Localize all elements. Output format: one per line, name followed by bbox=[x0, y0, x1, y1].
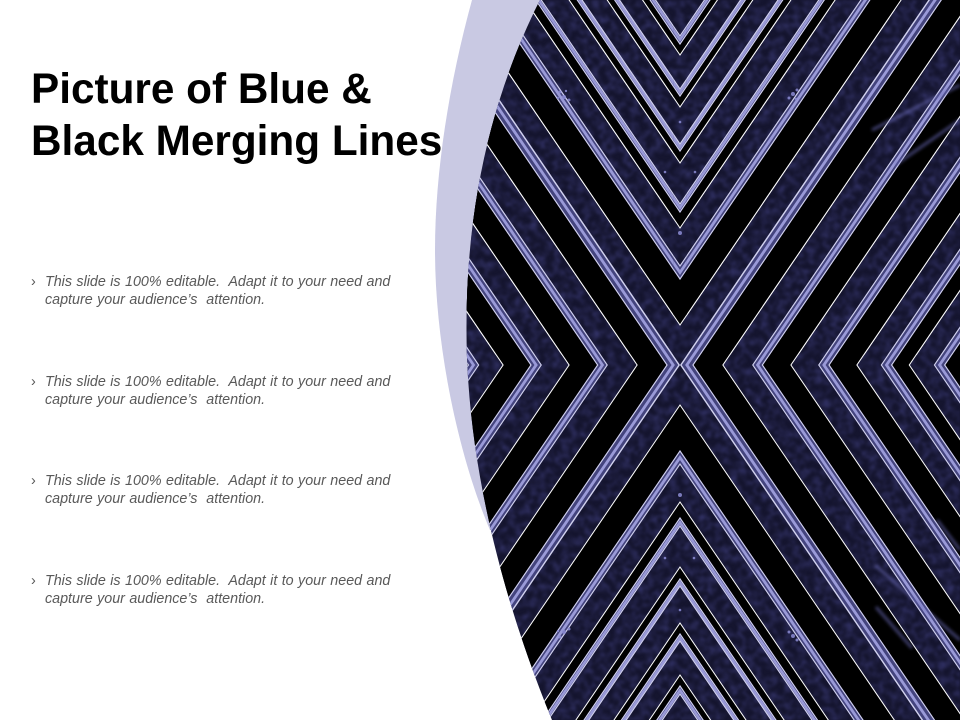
bullet text block 3: › bbox=[31, 473, 36, 489]
bullet text block 3: This slide is 100% editable. Adapt it to your need and capture your audience’s attention. bbox=[45, 473, 390, 507]
bullet text block 4: › bbox=[31, 573, 36, 589]
bullet text block 1: This slide is 100% editable. Adapt it to your need and capture your audience’s attention. bbox=[45, 274, 390, 308]
bullet text block 2: This slide is 100% editable. Adapt it to your need and capture your audience’s attention. bbox=[45, 374, 390, 408]
curved picture panel bbox=[435, 0, 960, 720]
bullet text block 4: This slide is 100% editable. Adapt it to your need and capture your audience’s attention. bbox=[45, 573, 390, 607]
speckle clusters bbox=[557, 88, 798, 642]
mirrored chevron line pattern bbox=[466, 0, 960, 720]
pale streaks at right edge bbox=[872, 85, 960, 648]
lavender curved band bbox=[435, 0, 560, 530]
title: Picture of Blue & bbox=[31, 65, 372, 112]
bullet text block 2: › bbox=[31, 374, 36, 390]
title: Black Merging Lines bbox=[31, 117, 442, 164]
title bbox=[31, 65, 442, 164]
textured navy base bbox=[440, 0, 960, 720]
bullet text block 1: › bbox=[31, 274, 36, 290]
